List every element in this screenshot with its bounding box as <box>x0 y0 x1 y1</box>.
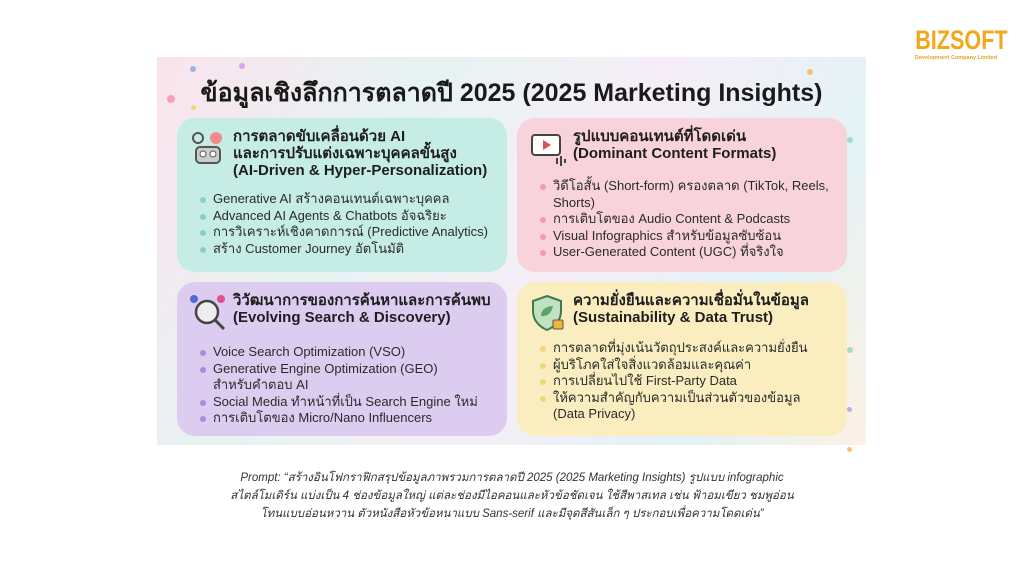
infographic artwork <box>157 57 866 445</box>
panel: sustainability & trust: การตลาดที่มุ่งเน้นวัตถุประสงค์และความยั่งยืน <box>553 340 807 355</box>
panel: AI-driven: การตลาดขับเคลื่อนด้วย AI <box>233 128 405 145</box>
panel: content formats: (Dominant Content Formats) <box>573 145 776 162</box>
logo: BIZSOFT: Development Company Limited <box>915 55 997 61</box>
panel: sustainability & trust: ให้ความสำคัญกับความเป็นส่วนตัวของข้อมูล <box>553 390 800 404</box>
panel: AI-driven: การวิเคราะห์เชิงคาดการณ์ (Predictive Analytics) <box>213 224 488 239</box>
panel: AI-driven: และการปรับแต่งเฉพาะบุคคลขั้นสูง <box>233 145 457 162</box>
icon: search magnifier <box>190 295 225 330</box>
panel: search & discovery: Social Media ทำหน้าที่เป็น Search Engine ใหม่ <box>213 394 478 408</box>
panel: search & discovery: การเติบโตของ Micro/Nano Influencers <box>213 410 432 425</box>
panel: sustainability & trust: ความยั่งยืนและความเชื่อมั่นในข้อมูล <box>573 292 809 309</box>
caption: prompt text: Prompt: “สร้างอินโฟกราฟิกสรุปข้อมูลภาพรวมการตลาดปี 2025 (2025 Marketing Insights) รูปแบบ infographic สไตล์โมเดิร์น แบ่งเป็น 4 ช่องข้อมูลใหญ่ แต่ละช่องมีไอคอนและหัวข้อชัดเจน ใช้สีพาสเทล เช่น ฟ้าอมเขียว ชมพูอ่อน โทนแบบอ่อนหวาน ตัวหนังสือหัวข้อหนาแบบ Sans-serif และมีจุดสีสันเล็ก ๆ ประกอบเพื่อความโดดเด่น” <box>230 472 794 520</box>
panel: sustainability & trust: การเปลี่ยนไปใช้ First-Party Data <box>553 373 737 388</box>
panel: AI-driven: สร้าง Customer Journey อัตโนมัติ <box>213 240 404 256</box>
logo: BIZSOFT: BIZSOFT <box>915 25 1008 55</box>
panel: sustainability & trust <box>517 282 847 436</box>
panel: content formats: User-Generated Content (UGC) ที่จริงใจ <box>553 244 784 259</box>
panel: search & discovery: (Evolving Search & Discovery) <box>233 309 451 326</box>
panel: content formats <box>517 118 847 272</box>
panel: content formats: วิดีโอสั้น (Short-form) ครองตลาด (TikTok, Reels, Shorts) <box>553 178 829 210</box>
panel: AI-driven: Advanced AI Agents & Chatbots อัจฉริยะ <box>213 208 447 222</box>
panel: content formats: Visual Infographics สำหรับข้อมูลซับซ้อน <box>553 228 781 242</box>
panel: search & discovery: สำหรับคำตอบ AI <box>213 377 308 392</box>
panel: search & discovery: Generative Engine Optimization (GEO) <box>213 360 438 376</box>
panel: content formats: การเติบโตของ Audio Content & Podcasts <box>553 211 790 226</box>
panel: AI-driven <box>177 118 507 272</box>
panel: content formats: รูปแบบคอนเทนต์ที่โดดเด่น <box>573 128 746 145</box>
panel: search & discovery: Voice Search Optimization (VSO) <box>213 344 405 359</box>
panel: AI-driven: Generative AI สร้างคอนเทนต์เฉพาะบุคคล <box>213 191 449 206</box>
icon: shield leaf lock <box>532 295 564 332</box>
title: ข้อมูลเชิงลึกการตลาดปี 2025 (2025 Marketing Insights) <box>201 79 822 107</box>
panel: sustainability & trust: (Sustainability & Data Trust) <box>573 309 773 326</box>
icon: video play <box>531 134 566 166</box>
panel: search & discovery <box>177 282 507 436</box>
panel: search & discovery: วิวัฒนาการของการค้นหาและการค้นพบ <box>233 292 491 309</box>
panel: sustainability & trust: (Data Privacy) <box>553 406 635 421</box>
panel: AI-driven: (AI-Driven & Hyper-Personalization) <box>233 162 487 179</box>
panel: sustainability & trust: ผู้บริโภคใส่ใจสิ่งแวดล้อมและคุณค่า <box>553 356 751 372</box>
icon: robot brain <box>192 132 222 164</box>
